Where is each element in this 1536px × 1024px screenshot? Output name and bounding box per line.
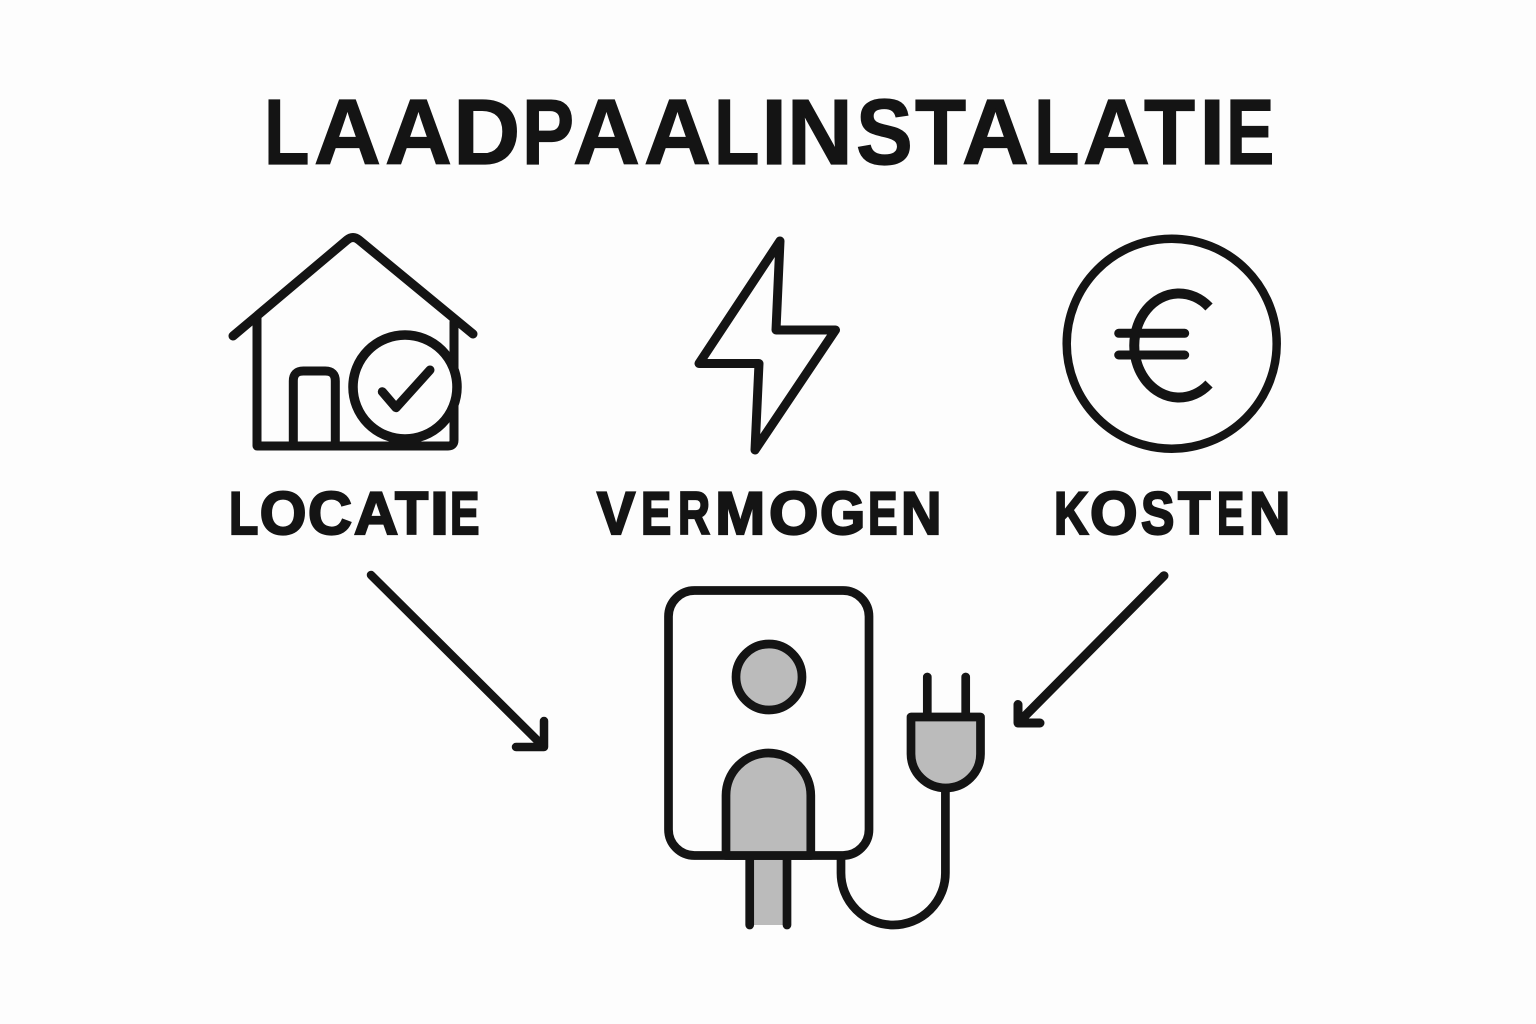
- title: A: [385, 80, 452, 184]
- arrow: kosten to charger: [1018, 576, 1164, 723]
- label: vermogen: V: [597, 480, 635, 547]
- label: locatie: [229, 480, 479, 547]
- label: vermogen: E: [868, 480, 898, 547]
- label: locatie: T: [395, 480, 428, 547]
- icon: euro coin: [1067, 239, 1277, 449]
- label: locatie: E: [450, 480, 479, 547]
- post outline: [750, 855, 787, 925]
- label: locatie: C: [308, 480, 352, 547]
- title: T: [915, 80, 966, 184]
- charger housing: [668, 590, 869, 856]
- title: I: [1199, 80, 1225, 184]
- label: kosten: T: [1178, 480, 1211, 547]
- charger post: [750, 855, 787, 925]
- title: [264, 80, 1274, 184]
- label: vermogen: [596, 480, 942, 547]
- label: locatie: O: [260, 480, 306, 547]
- title: A: [573, 80, 640, 184]
- label: vermogen: N: [901, 480, 942, 547]
- title: A: [1083, 80, 1150, 184]
- title: P: [522, 80, 574, 184]
- label: kosten: O: [1090, 480, 1138, 547]
- arrow: locatie to charger: [371, 575, 544, 747]
- charging cable: [841, 790, 945, 925]
- label: kosten: [1054, 480, 1291, 547]
- label: kosten: S: [1141, 480, 1174, 547]
- icon: charging station with plug: [668, 590, 980, 925]
- label: locatie: L: [229, 480, 258, 547]
- title: T: [1144, 80, 1195, 184]
- title: L: [264, 80, 309, 184]
- title: A: [314, 80, 381, 184]
- label: vermogen: E: [641, 480, 671, 547]
- title: I: [761, 80, 787, 184]
- label: kosten: N: [1249, 480, 1291, 547]
- title: D: [453, 80, 520, 184]
- label: vermogen: M: [715, 480, 765, 547]
- title: E: [1226, 80, 1274, 184]
- title: L: [714, 80, 759, 184]
- title: S: [856, 80, 912, 184]
- title: L: [1034, 80, 1079, 184]
- label: vermogen: R: [678, 480, 710, 547]
- label: locatie: A: [354, 480, 398, 547]
- icon: house with check mark: [233, 238, 473, 446]
- label: vermogen: G: [820, 480, 866, 547]
- charger socket: [726, 753, 811, 856]
- title: A: [962, 80, 1029, 184]
- label: vermogen: O: [769, 480, 818, 547]
- title: N: [787, 80, 853, 184]
- label: kosten: E: [1217, 480, 1245, 547]
- title: A: [644, 80, 711, 184]
- label: locatie: I: [430, 480, 449, 547]
- charger indicator light: [736, 644, 802, 710]
- plug body: [911, 717, 980, 788]
- label: kosten: K: [1054, 480, 1088, 547]
- icon: lightning bolt: [699, 241, 836, 450]
- plug pins: [927, 677, 966, 716]
